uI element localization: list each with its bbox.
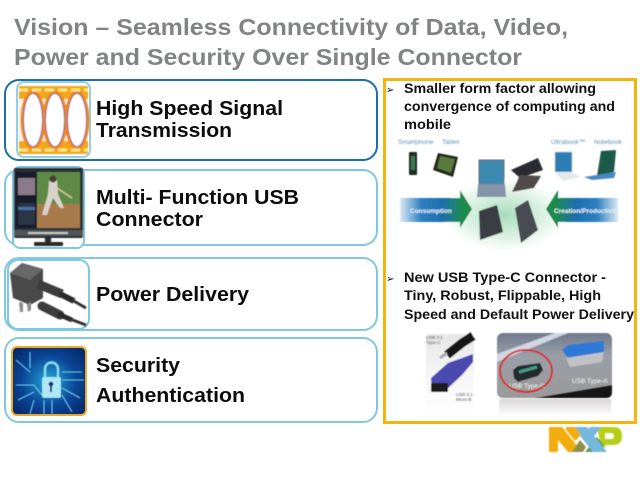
label: high speed: Transmission <box>96 120 232 142</box>
label: high speed: High Speed Signal <box>96 98 283 120</box>
bullet: form factor text <box>386 80 615 132</box>
image: device convergence <box>398 139 623 251</box>
panel: security authentication <box>5 338 377 422</box>
panel: right yellow box <box>384 80 636 422</box>
bullet: form factor text: convergence of computing and <box>404 98 615 114</box>
icon: security lock <box>12 347 86 415</box>
icon: TV with baseball <box>13 167 84 248</box>
image: device convergence: Ultrabook™ <box>551 139 585 146</box>
bullet: form factor text: ➢ <box>386 85 394 96</box>
image: device convergence: Tablet <box>442 139 460 146</box>
panel: power delivery <box>5 258 377 330</box>
bullet: USB type-C text <box>386 269 634 322</box>
title: Vision – Seamless Connectivity of Data, Video, <box>14 14 568 40</box>
panel: high speed signal transmission <box>5 80 377 160</box>
image: device convergence: Notebook <box>594 139 623 146</box>
image: USB ports photo <box>497 333 612 416</box>
bullet: form factor text: Smaller form factor allowing <box>404 80 596 96</box>
icon: charger <box>8 260 89 329</box>
bullet: USB type-C text: ➢ <box>386 274 394 285</box>
image: device convergence: Smartphone <box>398 139 434 146</box>
bullet: USB type-C text: New USB Type-C Connector - <box>404 269 606 285</box>
image: USB cables: Micro-B <box>456 397 472 402</box>
label: security authentication: Security <box>96 355 181 377</box>
label: power delivery: Power Delivery <box>96 284 250 306</box>
image: device convergence: Consumption <box>410 208 452 215</box>
title <box>14 14 568 70</box>
image: USB cables: USB 3.1 <box>426 335 443 340</box>
logo: NXP <box>549 427 622 452</box>
icon: eye diagram <box>17 82 90 157</box>
image: USB ports photo: USB Type-A <box>572 378 608 385</box>
image: USB cables: Type-C <box>426 340 441 345</box>
bullet: form factor text: mobile <box>404 116 451 132</box>
label: security authentication: Authentication <box>96 385 245 407</box>
image: USB ports photo: USB Type-C <box>509 383 545 390</box>
label: multi-function: Multi- Function USB <box>96 187 299 209</box>
bullet: USB type-C text: Tiny, Robust, Flippable, High <box>404 287 601 303</box>
panel: multi-function USB connector <box>5 167 377 248</box>
title: Power and Security Over Single Connector <box>14 44 522 70</box>
image: USB cables: USB 3.1 <box>456 392 473 397</box>
image: device convergence: Creation/Productivity <box>554 208 620 215</box>
image: USB cables <box>426 334 474 416</box>
bullet: USB type-C text: Speed and Default Power Delivery <box>404 306 634 322</box>
label: multi-function: Connector <box>96 209 203 231</box>
